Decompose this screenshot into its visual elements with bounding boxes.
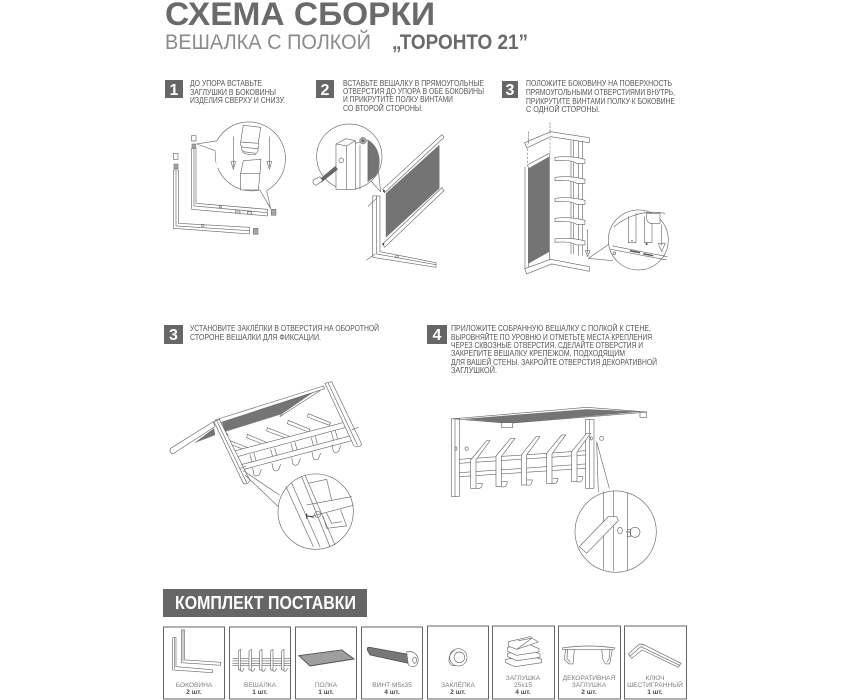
- item: screw: 4 шт.: [384, 689, 400, 696]
- item: shelf: ПОЛКА: [315, 682, 338, 689]
- item: side panel: 2 шт.: [186, 689, 202, 696]
- step 4 text: ПРИЛОЖИТЕ СОБРАННУЮ ВЕШАЛКУ С ПОЛКОЙ К СТЕНЕ,: [451, 324, 651, 333]
- step 3 text: ПРЯМОУГОЛЬНЫМИ ОТВЕРСТИЯМИ ВНУТРЬ,: [526, 88, 675, 97]
- step 2 text: ВСТАВЬТЕ ВЕШАЛКУ В ПРЯМОУГОЛЬНЫЕ: [343, 79, 484, 88]
- item: decorative plug: [558, 626, 620, 699]
- delivery set banner: КОМПЛЕКТ ПОСТАВКИ: [175, 593, 356, 613]
- item: shelf: [296, 627, 356, 699]
- item: rivet: 2 шт.: [450, 689, 466, 696]
- item: hex key: 1 шт.: [647, 689, 663, 696]
- step 2 text: СО ВТОРОЙ СТОРОНЫ.: [343, 104, 423, 113]
- step 3 rivets text: [190, 324, 379, 342]
- item: decorative plug: ЗАГЛУШКА: [572, 682, 607, 689]
- step 4 text: ДЛЯ ВАШЕЙ СТЕНЫ. ЗАКРОЙТЕ ОТВЕРСТИЯ ДЕКОРАТИВНОЙ: [451, 358, 657, 367]
- subtitle: [165, 30, 528, 54]
- step 3 text: ПРИКРУТИТЕ ВИНТАМИ ПОЛКУ К БОКОВИНЕ: [526, 97, 675, 106]
- panel: step 4: [427, 324, 657, 572]
- item: side panel: [164, 627, 224, 699]
- item: hanger: [230, 627, 290, 699]
- step 4 text: ЧЕРЕЗ СКВОЗНЫЕ ОТВЕРСТИЯ. СДЕЛАЙТЕ ОТВЕРСТИЯ И: [451, 341, 643, 350]
- step 4 drawing: [452, 407, 656, 572]
- step 3 text: С ОДНОЙ СТОРОНЫ.: [526, 105, 600, 114]
- item: side panel: БОКОВИНА: [176, 682, 213, 689]
- item: screw: ВИНТ М5х35: [372, 682, 412, 689]
- step 1 number: 1: [170, 82, 179, 99]
- step 1 text: ИЗДЕЛИЯ СВЕРХУ И СНИЗУ.: [190, 96, 285, 105]
- panel: step 3: [502, 79, 675, 274]
- step 3 rivets number: [164, 325, 183, 344]
- panel: step 3 rivets: [164, 324, 379, 549]
- panel: delivery set: [163, 589, 686, 699]
- step 2 number: [316, 80, 334, 99]
- delivery set banner: [163, 589, 367, 617]
- step 3 rivets number: 3: [169, 327, 178, 344]
- step 4 text: ЗАГЛУШКОЙ.: [451, 366, 497, 375]
- step 3 rivets text: СТОРОНЕ ВЕШАЛКИ ДЛЯ ФИКСАЦИИ.: [190, 333, 321, 342]
- item: plug: ЗАГЛУШКА: [506, 675, 541, 682]
- item: rivet: [428, 626, 488, 699]
- step 1 text: [190, 79, 285, 105]
- item: plug: 4 шт.: [515, 689, 531, 696]
- step 2 text: [343, 79, 484, 113]
- step 3 rivets text: УСТАНОВИТЕ ЗАКЛЁПКИ В ОТВЕРСТИЯ НА ОБОРОТНОЙ: [190, 324, 379, 333]
- step 1 drawing: [173, 122, 285, 234]
- step 3 rivets drawing: [170, 382, 362, 549]
- item: decorative plug: 2 шт.: [581, 689, 597, 696]
- item: plug: [492, 626, 554, 699]
- step 1 number: [165, 80, 183, 99]
- step 2 text: И ПРИКРУТИТЕ ПОЛКУ ВИНТАМИ: [343, 95, 453, 104]
- step 4 text: [451, 324, 657, 375]
- step 4 text: ЗАКРЕПИТЕ ВЕШАЛКУ КРЕПЕЖОМ, ПОДХОДЯЩИМ: [451, 349, 625, 358]
- item: plug: 25х15: [514, 682, 532, 689]
- step 2 drawing: [313, 124, 444, 267]
- step 3 text: ПОЛОЖИТЕ БОКОВИНУ НА ПОВЕРХНОСТЬ: [526, 79, 672, 88]
- step 3 text: [526, 79, 675, 114]
- step 2 text: ОТВЕРСТИЯ ДО УПОРА В ОБЕ БОКОВИНЫ: [343, 87, 484, 96]
- item: screw: [362, 627, 422, 699]
- step 1 text: ДО УПОРА ВСТАВЬТЕ: [190, 79, 262, 88]
- step 2 number: 2: [321, 82, 330, 99]
- item: shelf: 1 шт.: [318, 689, 334, 696]
- subtitle: „ТОРОНТО 21”: [392, 31, 528, 54]
- step 3 number: [502, 81, 518, 99]
- subtitle: ВЕШАЛКА С ПОЛКОЙ: [165, 30, 371, 54]
- panel: step 1: [165, 79, 285, 234]
- item: rivet: ЗАКЛЁПКА: [441, 681, 476, 689]
- step 3 drawing: [525, 123, 668, 274]
- step 1 text: ЗАГЛУШКИ В БОКОВИНЫ: [190, 88, 276, 97]
- item: hex key: [624, 626, 686, 699]
- item: decorative plug: ДЕКОРАТИВНАЯ: [563, 675, 616, 682]
- step 3 number: 3: [506, 82, 515, 99]
- panel: step 2: [313, 79, 484, 267]
- item: hex key: ШЕСТИГРАННЫЙ: [627, 680, 683, 689]
- item: hanger: ВЕШАЛКА: [244, 682, 277, 689]
- step 4 number: 4: [433, 327, 442, 344]
- step 4 number: [427, 325, 447, 344]
- item: hanger: 1 шт.: [252, 689, 268, 696]
- step 4 text: ВЫРОВНЯЙТЕ ПО УРОВНЮ И ОТМЕТЬТЕ МЕСТА КРЕПЛЕНИЯ: [451, 333, 652, 342]
- item: hex key: КЛЮЧ: [645, 675, 665, 682]
